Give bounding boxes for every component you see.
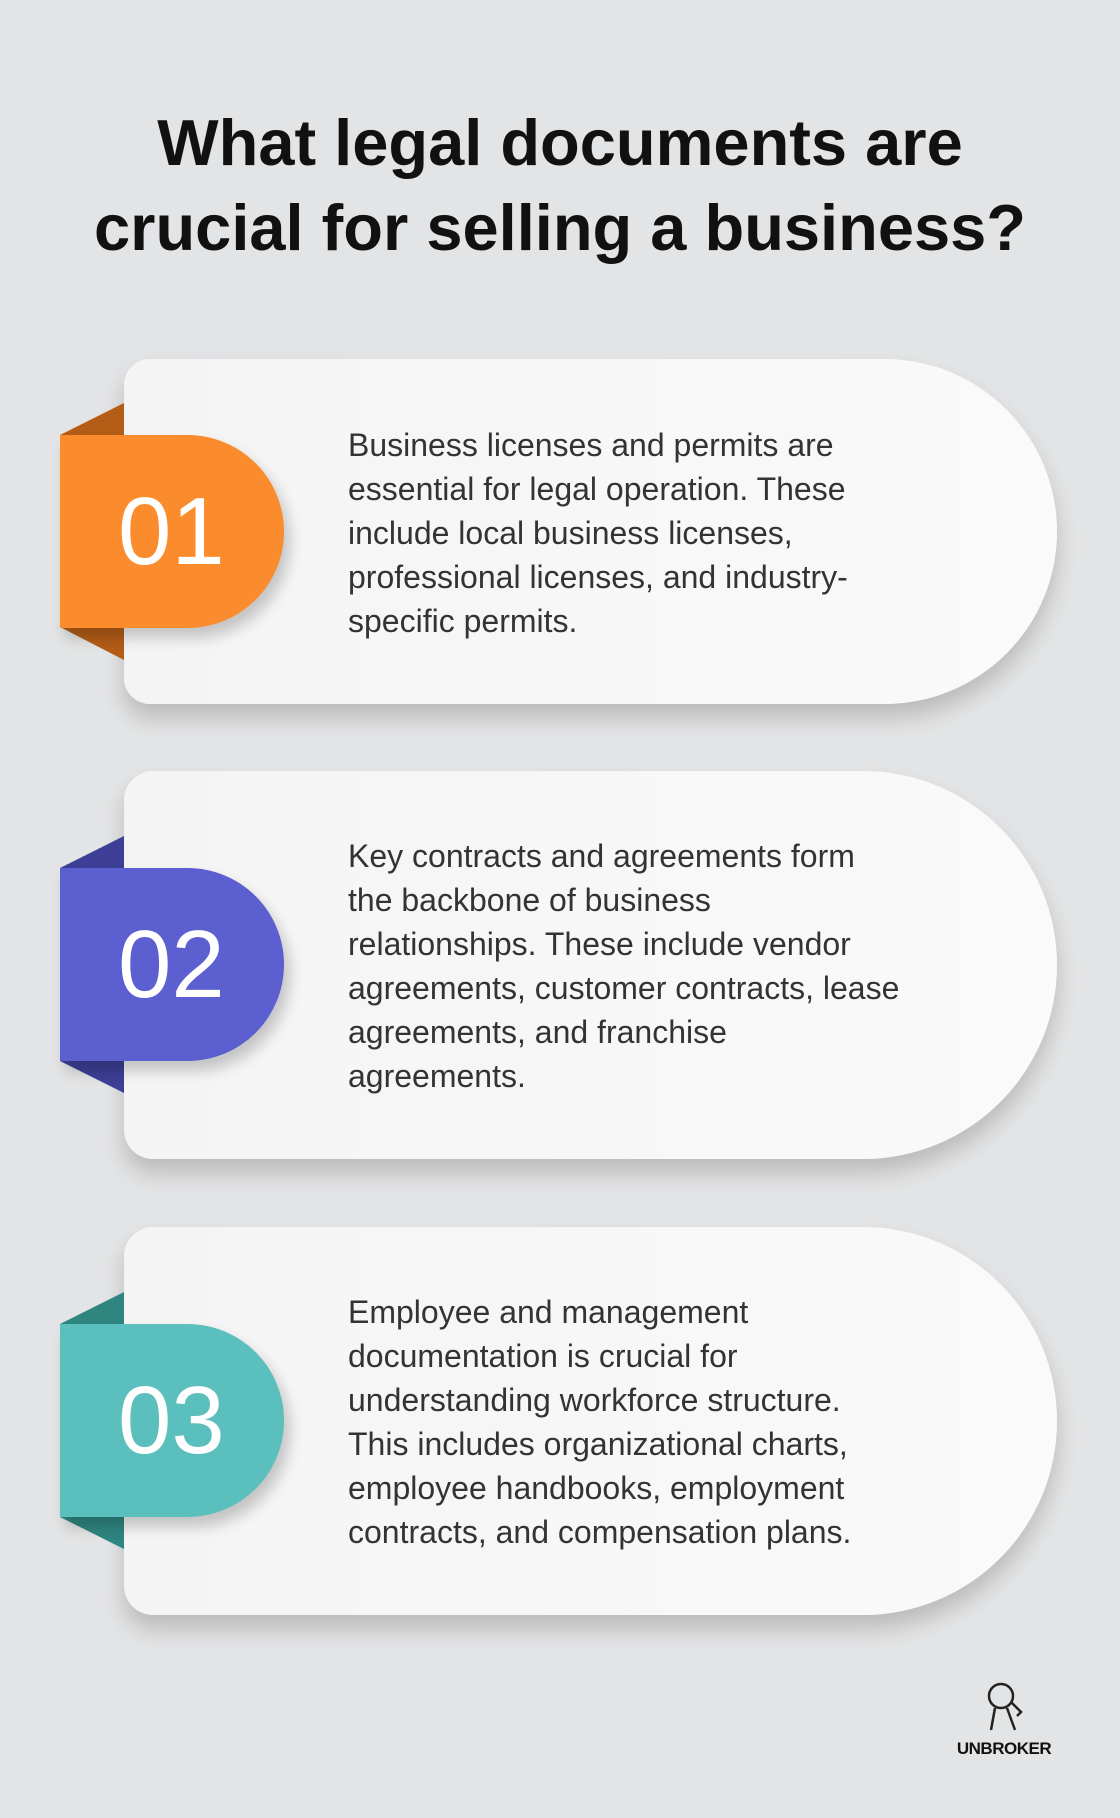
text 3: contracts, and compensation plans. xyxy=(348,1514,851,1550)
text 3: documentation is crucial for xyxy=(348,1338,738,1374)
text 3: understanding workforce structure. xyxy=(348,1382,841,1418)
text 2: relationships. These include vendor xyxy=(348,926,851,962)
text 1: include local business licenses, xyxy=(348,515,793,551)
title xyxy=(94,106,1026,264)
text 2: the backbone of business xyxy=(348,882,711,918)
text 3: This includes organizational charts, xyxy=(348,1426,848,1462)
text 3: Employee and management xyxy=(348,1294,748,1330)
text 1: Business licenses and permits are xyxy=(348,427,834,463)
text 2: agreements, and franchise xyxy=(348,1014,727,1050)
badge 03 xyxy=(60,1324,284,1517)
text 1: specific permits. xyxy=(348,603,577,639)
badge 02: 02 xyxy=(118,911,225,1018)
badge 01 xyxy=(60,435,284,628)
panel: card 2 xyxy=(124,771,1057,1159)
text 2: Key contracts and agreements form xyxy=(348,838,855,874)
text 2: agreements, customer contracts, lease xyxy=(348,970,899,1006)
title: What legal documents are xyxy=(157,106,963,179)
text 3 xyxy=(348,1294,851,1550)
panel: card 3 xyxy=(124,1227,1057,1615)
badge 02 xyxy=(60,868,284,1061)
text 3: employee handbooks, employment xyxy=(348,1470,844,1506)
fold: card 1 xyxy=(60,403,124,660)
logo xyxy=(957,1682,1052,1758)
title: crucial for selling a business? xyxy=(94,191,1026,264)
badge 03: 03 xyxy=(118,1367,225,1474)
text 2 xyxy=(348,838,899,1094)
text 1: essential for legal operation. These xyxy=(348,471,846,507)
fold: card 3 xyxy=(60,1292,124,1549)
badge 01: 01 xyxy=(118,478,225,585)
panel: card 1 xyxy=(124,359,1057,704)
text 1 xyxy=(348,427,848,639)
text 1: professional licenses, and industry- xyxy=(348,559,848,595)
fold: card 2 xyxy=(60,836,124,1093)
text 2: agreements. xyxy=(348,1058,526,1094)
logo: UNBROKER xyxy=(957,1739,1051,1758)
